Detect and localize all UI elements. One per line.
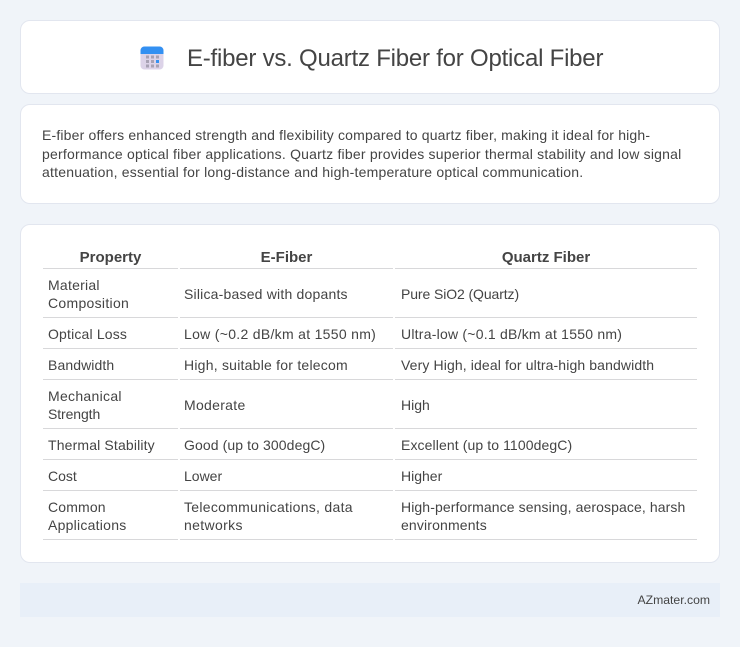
cell: Telecommunications, data <box>184 499 353 515</box>
row: Common Applications <box>48 499 126 533</box>
row: Common Applications: Applications <box>48 517 126 533</box>
cell: Good (up to 300degC) <box>184 437 325 453</box>
row: Material Composition: Material <box>48 277 100 293</box>
cell: Very High, ideal for ultra-high bandwidth <box>401 357 654 373</box>
cell: Ultra-low (~0.1 dB/km at 1550 nm) <box>401 326 622 342</box>
table panel <box>20 224 720 563</box>
row: Material Composition <box>48 277 129 311</box>
row: Mechanical Strength: Strength <box>48 406 100 422</box>
summary text: attenuation, essential for long-distance and high-temperature optical communication. <box>42 164 583 180</box>
footer bar <box>20 583 720 617</box>
cell: High-performance sensing, aerospace, harsh <box>401 499 685 515</box>
cell: Excellent (up to 1100degC) <box>401 437 572 453</box>
cell: Low (~0.2 dB/km at 1550 nm) <box>184 326 376 342</box>
row: Common Applications: Common <box>48 499 106 515</box>
cell: High <box>401 397 430 413</box>
row: Optical Loss: Optical Loss <box>48 326 127 342</box>
header: Quartz Fiber: Quartz Fiber <box>502 249 590 266</box>
title: E-fiber vs. Quartz Fiber for Optical Fiber <box>187 45 603 72</box>
cell <box>401 499 685 533</box>
cell: Pure SiO2 (Quartz) <box>401 286 519 302</box>
cell: environments <box>401 517 487 533</box>
cell: Moderate <box>184 397 246 413</box>
row: Cost: Cost <box>48 468 77 484</box>
cell: Higher <box>401 468 442 484</box>
footer credit: AZmater.com <box>638 593 710 607</box>
header panel <box>20 20 720 94</box>
cell: Lower <box>184 468 222 484</box>
header: Property: Property <box>80 249 141 266</box>
cell: High, suitable for telecom <box>184 357 348 373</box>
row: Mechanical Strength: Mechanical <box>48 388 122 404</box>
cell: networks <box>184 517 243 533</box>
summary text <box>42 127 681 180</box>
cell <box>184 499 353 533</box>
row: Material Composition: Composition <box>48 295 129 311</box>
header: E-Fiber: E-Fiber <box>261 249 312 266</box>
row: Thermal Stability: Thermal Stability <box>48 437 155 453</box>
summary text: performance optical fiber applications. Quartz fiber provides superior thermal stability and low signal <box>42 146 681 162</box>
row: Mechanical Strength <box>48 388 122 422</box>
summary panel <box>20 104 720 204</box>
icon: calendar <box>140 46 164 70</box>
summary text: E-fiber offers enhanced strength and flexibility compared to quartz fiber, making it ideal for high- <box>42 127 650 143</box>
cell: Silica-based with dopants <box>184 286 348 302</box>
row: Bandwidth: Bandwidth <box>48 357 114 373</box>
